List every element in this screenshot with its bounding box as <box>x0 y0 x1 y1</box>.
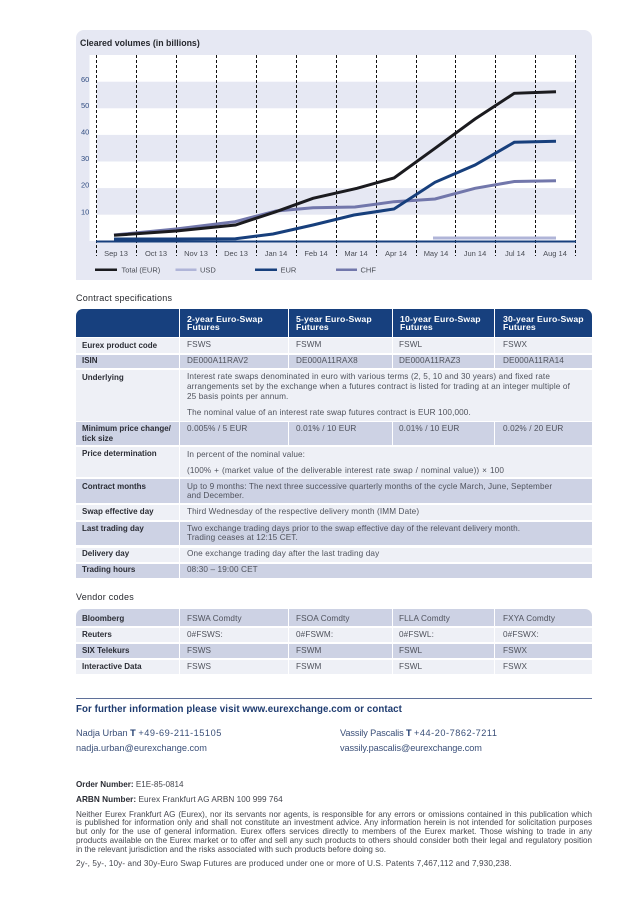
heading: contract specifications: Contract specifications <box>76 292 172 302</box>
row: Interactive Data: FSWX <box>503 662 527 671</box>
row: Underlying: The nominal value of an interest rate swap futures contract is EUR 100,000. <box>187 408 471 417</box>
x axis labels: Nov 13 <box>184 249 208 258</box>
row: Bloomberg: FXYA Comdty <box>503 614 555 623</box>
row: Minimum price change: 0.02% / 20 EUR <box>503 424 563 433</box>
legend: Total (EUR) <box>122 266 161 274</box>
legend: USD <box>200 266 216 274</box>
row: Eurex product code: FSWX <box>503 340 527 349</box>
x axis labels: Mar 14 <box>344 249 368 258</box>
row: Minimum price change: Minimum price change/ <box>82 424 171 433</box>
disclaimer: Neither Eurex Frankfurt AG (Eurex), nor its servants nor agents, is responsible for any errors or omissions contained in this publication which <box>76 810 592 818</box>
y axis labels <box>81 75 89 217</box>
row: ISIN: ISIN <box>82 356 98 365</box>
row: Interactive Data: FSWM <box>296 662 322 671</box>
disclaimer: in the relevant jurisdiction and the risks associated with such products before doing so. <box>76 845 386 854</box>
row: SIX Telekurs <box>76 644 592 658</box>
table header row: 30-year Euro-Swap <box>503 314 584 324</box>
row: Bloomberg: FLLA Comdty <box>399 614 450 623</box>
contact: Vassily Pascalis: Vassily Pascalis T +44-20-7862-7211 <box>340 728 498 738</box>
row: Eurex product code <box>76 338 592 353</box>
row: SIX Telekurs: FSWM <box>296 646 322 655</box>
chart heading: Cleared volumes (in billions) <box>80 38 200 48</box>
x axis <box>96 240 576 242</box>
x axis labels: Jul 14 <box>505 249 525 258</box>
row: Eurex product code: FSWL <box>399 340 422 349</box>
y axis labels: 60 <box>81 75 89 84</box>
table header row: Futures <box>400 322 433 332</box>
x axis labels: Jan 14 <box>265 249 287 258</box>
disclaimer <box>76 810 592 854</box>
row: Bloomberg <box>76 609 592 626</box>
heading: vendor codes: Vendor codes <box>76 592 134 602</box>
table header row: Futures <box>503 322 536 332</box>
x axis labels <box>104 249 567 258</box>
row: Swap effective day <box>76 505 592 520</box>
row: Minimum price change: 0.01% / 10 EUR <box>399 424 459 433</box>
row: SIX Telekurs: SIX Telekurs <box>82 646 129 655</box>
contact: Vassily Pascalis <box>340 728 498 753</box>
disclaimer: is published for information only and shall not constitute an investment advice. Any information herein is not intended for solicitation purposes <box>76 818 592 827</box>
row: Contract months: and December. <box>187 491 244 500</box>
legend: EUR <box>280 266 297 274</box>
table: contract specifications <box>76 309 592 578</box>
row: Contract months: Contract months <box>82 482 146 491</box>
contact: Nadja Urban: nadja.urban@eurexchange.com <box>76 743 207 753</box>
row: ISIN: DE000A11RAZ3 <box>399 356 460 365</box>
row: Contract months: Up to 9 months: The next three successive quarterly months of the cycle March, June, September <box>187 482 552 491</box>
row: Interactive Data: FSWS <box>187 662 211 671</box>
line chart <box>81 55 576 274</box>
disclaimer: products available on the Eurex market or to offer and sell any such products to others should consider both their legal and regulatory position <box>76 836 592 845</box>
row: Minimum price change: tick size <box>82 434 113 443</box>
ARBN number: ARBN Number: Eurex Frankfurt AG ARBN 100 999 764 <box>76 794 283 804</box>
table header row: 10-year Euro-Swap <box>400 314 481 324</box>
row: Swap effective day: Third Wednesday of the respective delivery month (IMM Date) <box>187 507 419 516</box>
row: ISIN: DE000A11RA14 <box>503 356 564 365</box>
row: Reuters: 0#FSWL: <box>399 630 434 639</box>
x axis labels: Aug 14 <box>543 249 567 258</box>
row: Interactive Data: FSWL <box>399 662 422 671</box>
y axis labels: 10 <box>81 208 89 217</box>
row: Underlying: Underlying <box>82 373 124 382</box>
table header row: Futures <box>296 322 329 332</box>
row: Last trading day <box>76 522 592 545</box>
contact section <box>76 698 592 756</box>
row: Bloomberg: FSWA Comdty <box>187 614 242 623</box>
table header row <box>76 309 592 337</box>
x axis labels: Oct 13 <box>145 249 167 258</box>
contact: Vassily Pascalis: vassily.pascalis@eurexchange.com <box>340 743 482 753</box>
order number: Order Number: E1E-85-0814 <box>76 780 184 789</box>
row: Minimum price change: 0.005% / 5 EUR <box>187 424 247 433</box>
row: Price determination <box>76 447 592 477</box>
x axis labels: Jun 14 <box>464 249 486 258</box>
y axis labels: 30 <box>81 154 89 163</box>
row: Delivery day: Delivery day <box>82 549 129 558</box>
row: SIX Telekurs: FSWX <box>503 646 527 655</box>
row: Price determination: (100% + (market value of the deliverable interest rate swap / nominal value)) × 100 <box>187 466 504 474</box>
row: Underlying <box>76 370 592 421</box>
legend: CHF <box>360 266 376 274</box>
row: Swap effective day: Swap effective day <box>82 507 154 516</box>
row: Reuters <box>76 628 592 642</box>
series: Total EUR <box>114 92 556 235</box>
row: Underlying: Interest rate swaps denominated in euro with various terms (2, 5, 10 and 30 years) and fixed rate <box>187 372 550 380</box>
row: Price determination: Price determination <box>82 449 157 458</box>
row: Bloomberg: FSOA Comdty <box>296 614 350 623</box>
table header row: 2-year Euro-Swap <box>187 314 263 324</box>
table: vendor codes <box>76 609 592 674</box>
row: Interactive Data: Interactive Data <box>82 662 142 671</box>
row: Interactive Data <box>76 660 592 674</box>
row: Trading hours: 08:30 – 19:00 CET <box>187 565 258 574</box>
row: Delivery day <box>76 548 592 562</box>
row: ISIN <box>76 355 592 368</box>
contact heading: For further information please visit www.eurexchange.com or contact <box>76 704 402 715</box>
row: Underlying: arrangements set by the exchange when a futures contract is listed for trading at an integer multiple of <box>187 382 570 390</box>
row: Reuters: Reuters <box>82 630 112 639</box>
y axis labels: 40 <box>81 128 89 137</box>
row: Contract months <box>76 479 592 503</box>
series: USD <box>433 236 556 240</box>
row: SIX Telekurs: FSWL <box>399 646 422 655</box>
row: Trading hours: Trading hours <box>82 565 135 574</box>
row: Delivery day: One exchange trading day after the last trading day <box>187 549 379 558</box>
table header row: Futures <box>187 322 220 332</box>
x axis labels: Sep 13 <box>104 249 128 258</box>
row: Minimum price change: 0.01% / 10 EUR <box>296 424 356 433</box>
contact: Nadja Urban: Nadja Urban T +49-69-211-15105 <box>76 728 222 738</box>
legend <box>95 266 376 274</box>
row: Last trading day: Trading ceases at 12:15 CET. <box>187 533 298 542</box>
row: Eurex product code: FSWS <box>187 340 211 349</box>
row: Price determination: In percent of the nominal value: <box>187 450 305 459</box>
series: EUR <box>114 141 556 239</box>
disclaimer: but only for the use of general information. Eurex offers services directly to members of the Eurex market. Those wishing to trade in any <box>76 827 592 836</box>
x axis labels: Dec 13 <box>224 249 248 258</box>
x axis labels: May 14 <box>424 249 448 258</box>
series: CHF <box>114 181 556 235</box>
row: Last trading day: Last trading day <box>82 524 144 533</box>
row: Trading hours <box>76 564 592 578</box>
row: Reuters: 0#FSWM: <box>296 630 333 639</box>
row: ISIN: DE000A11RAV2 <box>187 356 248 365</box>
row: Eurex product code: Eurex product code <box>82 341 157 350</box>
contact: Nadja Urban <box>76 728 222 753</box>
row: Reuters: 0#FSWS: <box>187 630 223 639</box>
row: SIX Telekurs: FSWS <box>187 646 211 655</box>
row: Eurex product code: FSWM <box>296 340 322 349</box>
x axis labels: Feb 14 <box>304 249 328 258</box>
patent note: 2y-, 5y-, 10y- and 30y-Euro Swap Futures are produced under one or more of U.S. Patents 7,467,112 and 7,930,238. <box>76 858 512 868</box>
panel: cleared volumes chart <box>76 30 592 280</box>
row: ISIN: DE000A11RAX8 <box>296 356 358 365</box>
x axis labels: Apr 14 <box>385 249 407 258</box>
row: Minimum price change <box>76 422 592 445</box>
row: Last trading day: Two exchange trading days prior to the swap effective day of the relevant delivery month. <box>187 524 520 533</box>
row: Underlying: 25 basis points per annum. <box>187 392 288 401</box>
row: Bloomberg: Bloomberg <box>82 614 124 623</box>
row: Reuters: 0#FSWX: <box>503 630 539 639</box>
y axis labels: 50 <box>81 101 89 110</box>
y axis labels: 20 <box>81 181 89 190</box>
table header row: 5-year Euro-Swap <box>296 314 372 324</box>
